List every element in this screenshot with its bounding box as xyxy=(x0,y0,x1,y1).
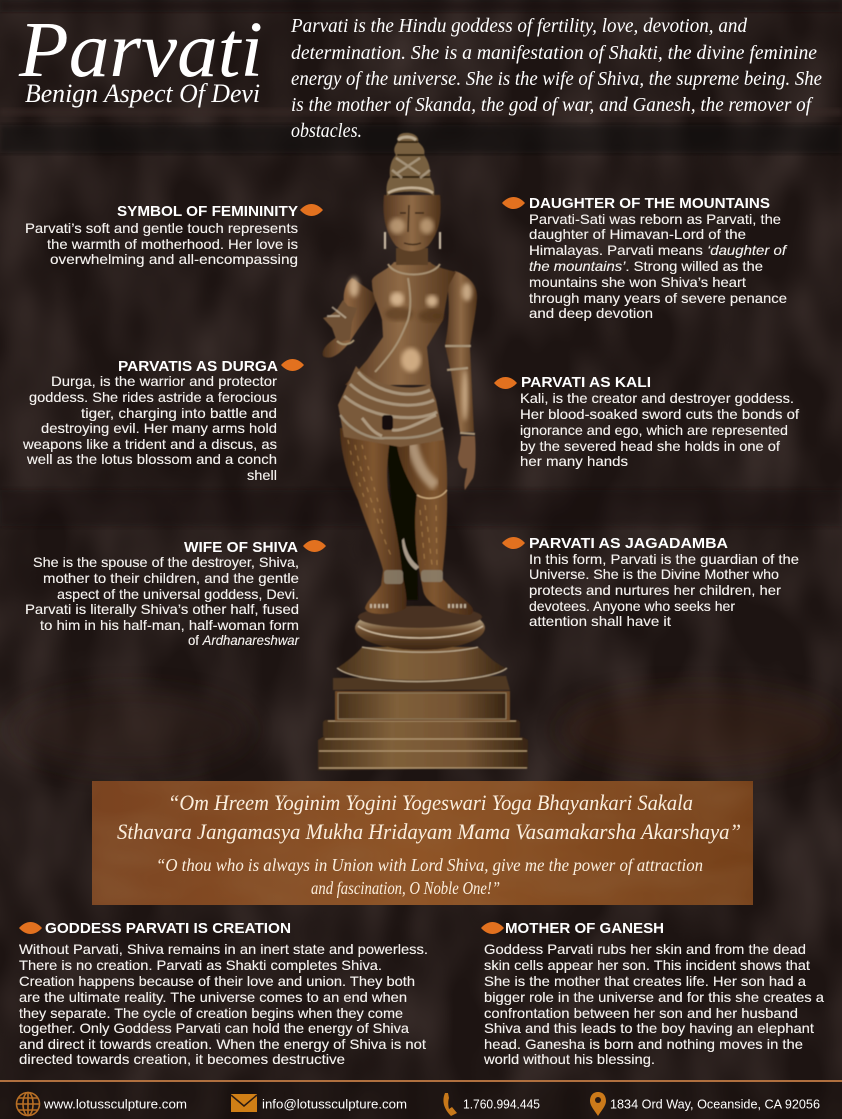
left leg xyxy=(340,428,407,614)
body text: She is the mother that creates life. Her son had a xyxy=(484,974,806,989)
body text: Kali, is the creator and destroyer goddess. xyxy=(520,391,794,406)
icon: petal xyxy=(303,540,326,552)
section: daughter of the mountains xyxy=(502,195,787,321)
panel: mantra quote xyxy=(92,781,753,905)
icon: petal xyxy=(494,377,517,389)
body text xyxy=(25,221,298,267)
body text: Shiva and this leads to the boy having an elephant xyxy=(484,1021,814,1036)
head and crown xyxy=(383,133,441,265)
raised arm and hand xyxy=(323,278,378,358)
body text: head. Ganesha is born and nothing moves in the xyxy=(484,1037,803,1052)
body text: and direct it towards creation. When the energy of Shiva is not xyxy=(19,1037,426,1052)
mantra text xyxy=(117,790,741,844)
body text: together. Only Goddess Parvati can hold the energy of Shiva xyxy=(19,1021,409,1036)
body text: ignorance and ego, which are represented xyxy=(520,423,788,438)
heading: GODDESS PARVATI IS CREATION xyxy=(45,920,291,937)
section: parvati as kali xyxy=(494,374,799,469)
body text: Parvati’s soft and gentle touch represents xyxy=(25,221,298,236)
body text: Goddess Parvati rubs her skin and from the dead xyxy=(484,942,806,957)
translation text: and fascination, O Noble One!” xyxy=(311,878,500,898)
body text: overwhelming and all-encompassing xyxy=(50,252,298,267)
right arm xyxy=(445,271,477,432)
body text xyxy=(529,212,787,321)
body text: Parvati is literally Shiva’s other half, fused xyxy=(25,602,299,617)
icon: petal xyxy=(481,922,504,934)
body text: through many years of severe penance xyxy=(529,291,787,306)
intro paragraph: is the mother of Skanda, the god of war, and Ganesh, the remover of xyxy=(291,94,814,116)
body text: She is the spouse of the destroyer, Shiva, xyxy=(33,555,299,570)
body text: are the ultimate reality. The universe comes to an end when xyxy=(19,990,407,1005)
body text xyxy=(19,942,428,1067)
body text: Her blood-soaked sword cuts the bonds of xyxy=(520,407,799,422)
title block: Parvati xyxy=(18,7,263,94)
body text: of Ardhanareshwar xyxy=(188,633,299,648)
body text xyxy=(22,374,278,483)
body text: Without Parvati, Shiva remains in an inert state and powerless. xyxy=(19,942,428,957)
body text: destroying evil. Her many arms hold xyxy=(41,421,277,436)
heading: MOTHER OF GANESH xyxy=(505,920,664,937)
heading: PARVATI AS KALI xyxy=(521,374,651,391)
body text: weapons like a trident and a discus, as xyxy=(22,437,277,452)
belt and hips xyxy=(338,366,444,447)
icon: location pin xyxy=(590,1092,606,1116)
statue base xyxy=(318,606,528,770)
intro paragraph xyxy=(290,15,822,142)
body text: well as the lotus blossom and a conch xyxy=(26,452,277,467)
section: parvati as jagadamba xyxy=(502,535,799,629)
icon: phone xyxy=(443,1093,457,1116)
body text xyxy=(483,942,824,1067)
body text: goddess. She rides astride a ferocious xyxy=(29,390,277,405)
heading: SYMBOL OF FEMININITY xyxy=(117,203,298,220)
address: 1834 Ord Way, Oceanside, CA 92056 xyxy=(610,1096,820,1112)
body text: In this form, Parvati is the guardian of the xyxy=(529,552,799,567)
body text xyxy=(520,391,799,469)
body text: Himalayas. Parvati means ‘daughter of xyxy=(529,243,787,258)
body text: to him in his half-man, half-woman form xyxy=(40,618,299,633)
icon: petal xyxy=(300,204,323,216)
section: parvati as durga xyxy=(22,358,304,483)
body text: the mountains’ . Strong willed as the xyxy=(529,259,763,274)
body text: and deep devotion xyxy=(529,306,653,321)
heading: PARVATIS AS DURGA xyxy=(118,358,278,375)
section: goddess parvati is creation xyxy=(19,920,428,1067)
body text: aspect of the universal goddess, Devi. xyxy=(57,587,299,602)
icon: globe xyxy=(16,1092,40,1116)
dark gap and scarf between legs xyxy=(386,440,418,600)
mantra text: Sthavara Jangamasya Mukha Hridayam Mama Vasamakarsha Akarshaya” xyxy=(117,819,741,844)
website: www.lotussculpture.com xyxy=(43,1096,187,1112)
body text: shell xyxy=(247,468,277,483)
body text: tiger, charging into battle and xyxy=(81,406,277,421)
body text: Parvati-Sati was reborn as Parvati, the xyxy=(529,212,781,227)
body text: attention shall have it xyxy=(529,614,671,629)
icon: petal xyxy=(281,359,304,371)
body text: There is no creation. Parvati as Shakti completes Shiva. xyxy=(19,958,382,973)
body text: the warmth of motherhood. Her love is xyxy=(47,237,298,252)
body text: Universe. She is the Divine Mother who xyxy=(529,567,779,582)
intro paragraph: determination. She is a manifestation of Shakti, the divine feminine xyxy=(291,42,817,64)
body text xyxy=(25,555,299,648)
body text: world without his blessing. xyxy=(483,1052,655,1067)
statue of Parvati xyxy=(318,133,528,770)
icon: petal xyxy=(19,922,42,934)
body text: skin cells appear her son. This incident shows that xyxy=(484,958,810,973)
right leg xyxy=(395,428,473,615)
body text: devotees. Anyone who seeks her xyxy=(529,599,735,614)
body text: protects and nurtures her children, her xyxy=(529,583,782,598)
body text: mother to their children, and the gentle xyxy=(43,571,299,586)
body text: they separate. The cycle of creation begins when they come xyxy=(19,1006,403,1021)
body text: mountains she won Shiva’s heart xyxy=(529,275,746,290)
section: mother of ganesh xyxy=(481,920,824,1067)
intro paragraph: Parvati is the Hindu goddess of fertility, love, devotion, and xyxy=(290,15,748,37)
email: info@lotussculpture.com xyxy=(262,1096,407,1112)
body text: daughter of Himavan-Lord of the xyxy=(529,227,746,242)
phone number: 1.760.994.445 xyxy=(463,1096,540,1112)
hand hanging xyxy=(458,436,476,490)
icon: mail xyxy=(231,1094,257,1112)
heading: DAUGHTER OF THE MOUNTAINS xyxy=(529,195,770,212)
statue highlights xyxy=(349,277,472,421)
body text: confrontation between her son and her husband xyxy=(484,1006,798,1021)
section: wife of shiva xyxy=(25,539,326,648)
body text: directed towards creation, it becomes destructive xyxy=(19,1052,345,1067)
footer contact bar xyxy=(0,1080,842,1116)
heading: PARVATI AS JAGADAMBA xyxy=(529,535,728,552)
heading: WIFE OF SHIVA xyxy=(184,539,298,556)
body text: Creation happens because of their love and union. They both xyxy=(19,974,415,989)
icon: petal xyxy=(502,537,525,549)
intro paragraph: obstacles. xyxy=(291,120,362,142)
icon: petal xyxy=(502,197,525,209)
body text: bigger role in the universe and for this she creates a xyxy=(484,990,824,1005)
subtitle: Benign Aspect Of Devi xyxy=(25,79,260,108)
body text xyxy=(529,552,799,629)
translation text xyxy=(156,855,703,898)
section: symbol of femininity xyxy=(25,203,323,267)
body text: her many hands xyxy=(520,454,628,469)
mantra text: “Om Hreem Yoginim Yogini Yogeswari Yoga Bhayankari Sakala xyxy=(168,790,693,815)
body text: Durga, is the warrior and protector xyxy=(51,374,278,389)
body text: by the severed head she holds in one of xyxy=(520,439,780,454)
translation text: “O thou who is always in Union with Lord Shiva, give me the power of attraction xyxy=(156,855,703,875)
torso xyxy=(345,262,456,385)
